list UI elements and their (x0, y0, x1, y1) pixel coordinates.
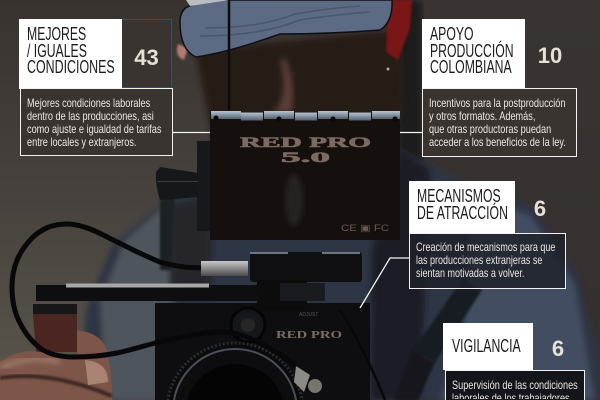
description: y otros formatos. Además, (429, 110, 535, 123)
heading: MECANISMOS (417, 186, 501, 206)
cap (180, 0, 392, 112)
heading: MEJORES (27, 24, 86, 44)
panel: mejores / iguales condiciones (19, 19, 173, 156)
description (422, 88, 577, 157)
hand (0, 330, 112, 400)
description: Incentivos para la postproducción (429, 97, 565, 110)
number: 6 (552, 336, 564, 361)
panel: apoyo producción colombiana (422, 19, 577, 157)
description: Supervisión de las condiciones (452, 379, 578, 392)
panel: vigilancia (443, 323, 585, 400)
monitor RED PRO 5.0 (197, 111, 400, 240)
heading: VIGILANCIA (452, 336, 521, 356)
connector lines (172, 132, 422, 308)
heading: PRODUCCIÓN (430, 41, 514, 61)
heading (409, 181, 515, 234)
heading: / IGUALES (27, 41, 87, 61)
description: acceder a los beneficios de la ley. (429, 136, 566, 149)
number box: 43 (134, 45, 159, 70)
monitor label: RED PRO (240, 135, 371, 151)
body label: RED PRO (276, 329, 343, 341)
description: Creación de mecanismos para que (416, 241, 555, 254)
number: 10 (538, 43, 562, 68)
description: entre locales y extranjeros. (27, 136, 136, 149)
heading: DE ATRACCIÓN (417, 203, 508, 223)
description (409, 233, 566, 289)
description: como ajuste e igualdad de tarifas (27, 123, 161, 136)
description (445, 370, 585, 400)
description: Mejores condiciones laborales (27, 97, 150, 110)
face (177, 0, 412, 150)
handle and rod (33, 284, 260, 352)
hoodie (78, 148, 600, 400)
panel: mecanismos de atracción (409, 181, 566, 289)
number box (122, 19, 172, 88)
description: las producciones extranjeras se (416, 254, 542, 267)
camera body (155, 252, 370, 400)
camera body: ADJUST (299, 312, 318, 318)
number: 6 (534, 196, 546, 221)
description (20, 88, 173, 156)
heading (422, 19, 525, 89)
monitor RED PRO 5.0: 5.0 (281, 150, 330, 166)
heading: CONDICIONES (27, 57, 115, 77)
heading: APOYO (430, 24, 474, 44)
side knob (156, 167, 198, 200)
heading (443, 323, 533, 370)
cable (12, 224, 385, 400)
monitor RED PRO 5.0: CE ▣ FC (341, 223, 390, 233)
description: dentro de las producciones, asi (27, 110, 154, 123)
heading (19, 19, 122, 89)
heading: COLOMBIANA (430, 57, 512, 77)
lens (167, 343, 303, 400)
description: sientan motivadas a volver. (416, 267, 524, 280)
description: que otras productoras puedan (429, 123, 551, 136)
